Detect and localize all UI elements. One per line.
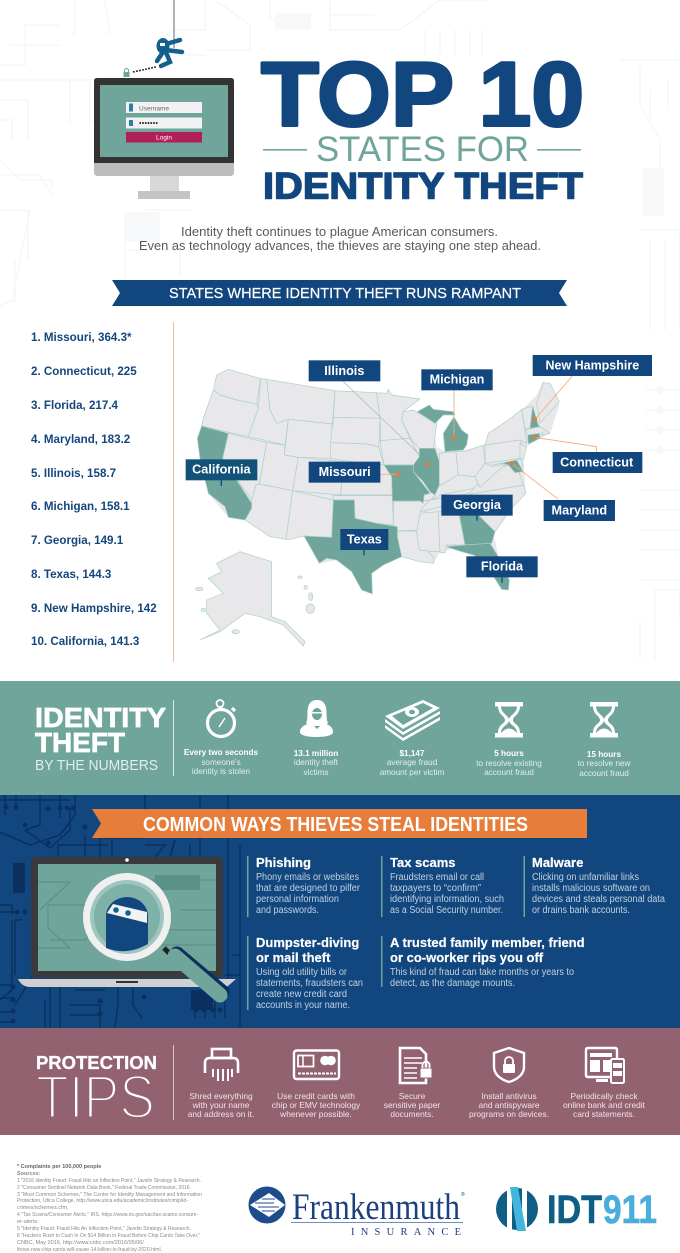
logo: Frankenmuth Insurance [248, 1186, 465, 1238]
map of United States: Maryland [552, 503, 607, 517]
ranked state list: 7. Georgia, 149.1 [31, 534, 124, 547]
text block: phishing: Phony emails or websites [256, 872, 359, 883]
map of United States: Connecticut [560, 455, 634, 469]
text block: trusted family member: This kind of fraud can take months or years to [390, 967, 575, 978]
text block: dumpster-diving: Using old utility bills or [256, 967, 348, 978]
tip: secure documents: Secure [399, 1091, 426, 1101]
tip: antivirus: programs on devices. [469, 1109, 549, 1119]
icon: stack of money [385, 700, 440, 741]
tip: antivirus: Install antivirus [481, 1091, 537, 1101]
tip: secure documents [384, 1091, 440, 1119]
heading: identity theft by the numbers: THEFT [35, 727, 125, 758]
stat: every two seconds: identity is stolen [192, 767, 251, 776]
tip: secure documents: sensitive paper [384, 1100, 440, 1110]
tip: credit cards: chip or EMV technology [272, 1100, 361, 1110]
ranked state list: 4. Maryland, 183.2 [31, 433, 130, 446]
footnotes and sources: 2 "Consumer Sentinel Network Data Book," Federal Trade Commission, 2016. [17, 1185, 191, 1191]
map of United States: Georgia [453, 498, 502, 512]
map of United States: Michigan [430, 373, 484, 387]
panel: protection tips [0, 1028, 680, 1135]
stat: 13.1 million: 13.1 million [294, 749, 338, 758]
icon: shield with padlock [494, 1048, 524, 1082]
stat: 5 hours: 5 hours [494, 749, 524, 758]
logo: IDT911: IDT [547, 1188, 602, 1232]
heading: identity theft by the numbers [35, 702, 166, 774]
text block: malware: Clicking on unfamiliar links [532, 872, 639, 883]
text block: dumpster-diving: Dumpster-diving [256, 935, 359, 950]
stat: every two seconds: Every two seconds [184, 748, 259, 757]
stat: $1,147 [380, 749, 444, 777]
map of United States: Florida [481, 560, 524, 574]
stat: 5 hours: account fraud [484, 768, 534, 777]
text block: malware: or drains bank accounts. [532, 905, 630, 916]
text block: phishing: that are designed to pilfer [256, 883, 361, 894]
intro text [139, 224, 541, 253]
ranked state list: 10. California, 141.3 [31, 635, 140, 648]
stat: 15 hours: to resolve new [578, 759, 630, 768]
stat: 15 hours [578, 750, 630, 778]
tip: antivirus: and antispyware [478, 1100, 540, 1110]
ranked state list: 8. Texas, 144.3 [31, 568, 112, 581]
title: IDENTITY THEFT [263, 166, 583, 206]
icon: desktop monitor with login form: ••••••• [139, 120, 159, 128]
tip: secure documents: documents. [390, 1109, 434, 1119]
text block: dumpster-diving: statements, fraudsters can [256, 978, 363, 989]
icon: desktop monitor with login form: Username [139, 106, 169, 112]
text block: dumpster-diving: create new credit card [256, 989, 347, 1000]
text block: tax scams: Fraudsters email or call [390, 872, 484, 883]
footnotes and sources: 4 "Tax Scams/Consumer Alerts," IRS, https://www.irs.gov/uac/tax-scams-consum- [17, 1212, 198, 1218]
tip: credit cards [272, 1091, 361, 1119]
ranked state list: 2. Connecticut, 225 [31, 365, 137, 378]
footnotes and sources: 1 "2016 Identity Fraud: Fraud Hits an Inflection Point," Javelin Strategy & Research. [17, 1178, 201, 1184]
footnotes and sources: Sources: [17, 1171, 41, 1177]
footnotes and sources: 6 "Hackers Rush to Cash In On $14 Billion in Fraud Before Chip Cards Take Over," [17, 1233, 200, 1239]
text block: malware [532, 855, 666, 916]
tip: shred: and address on it. [188, 1109, 254, 1119]
logo: Frankenmuth Insurance: ® [461, 1191, 465, 1198]
footnotes and sources [17, 1164, 202, 1253]
text block: tax scams: Tax scams [390, 855, 456, 870]
tip: shred [188, 1091, 254, 1119]
icon: padlock with password dots [124, 67, 156, 77]
icon: laptop with magnifier and thief [18, 857, 236, 995]
heading: identity theft by the numbers: IDENTITY [35, 702, 166, 733]
footnotes and sources: * Complaints per 100,000 people [17, 1164, 101, 1170]
tip: shred: with your name [192, 1100, 250, 1110]
text block: dumpster-diving: or mail theft [256, 950, 331, 965]
intro text: Identity theft continues to plague American consumers. [181, 224, 498, 239]
text block: phishing: personal information [256, 894, 339, 905]
tip: check statements: card statements. [573, 1109, 635, 1119]
text block: malware: Malware [532, 855, 583, 870]
icon: stopwatch [208, 700, 235, 736]
heading: protection tips: PROTECTION [36, 1053, 157, 1073]
icon: computer and phone [586, 1048, 624, 1083]
stat: every two seconds [184, 748, 259, 776]
map of United States: Missouri [319, 465, 371, 479]
map of United States: New Hampshire [545, 358, 639, 372]
ranked state list: 6. Michigan, 158.1 [31, 500, 130, 513]
stat: 13.1 million [294, 749, 339, 777]
text block: dumpster-diving [256, 935, 363, 1011]
tip: check statements [563, 1091, 646, 1119]
stat: $1,147: average fraud [387, 758, 438, 767]
ranked state list [31, 331, 157, 648]
stat: 15 hours: account fraud [579, 769, 629, 778]
text block: phishing [256, 855, 361, 916]
tip: shred: Shred everything [189, 1091, 253, 1101]
heading: protection tips: TIPS [36, 1063, 155, 1131]
stat: every two seconds: someone's [201, 758, 241, 767]
banner: states heading: STATES WHERE IDENTITY THEFT RUNS RAMPANT [169, 286, 521, 302]
panel: identity theft by the numbers [0, 681, 680, 795]
ranked state list: 9. New Hampshire, 142 [31, 602, 157, 615]
tip: credit cards: Use credit cards with [277, 1091, 355, 1101]
icon: thief on rope [156, 0, 182, 66]
text block: trusted family member: or co-worker rips you off [390, 950, 544, 965]
footnotes and sources: those-new-chip-cards-will-cause-14-billion-in-fraud-by-2020.html. [17, 1247, 162, 1253]
text block: tax scams [390, 855, 504, 916]
stat: 5 hours [476, 749, 542, 777]
map of United States [186, 355, 652, 646]
banner: common ways [92, 809, 587, 838]
tip: antivirus [469, 1091, 549, 1119]
footnotes and sources: CNBC, May 2016, http://www.cnbc.com/2016/05/06/ [17, 1240, 144, 1246]
text block: tax scams: as a Social Security number. [390, 905, 503, 916]
footnotes and sources: 3 "Most Common Schemes," The Center for Identity Management and Information [17, 1192, 202, 1198]
text block: trusted family member: detect, as the damage mounts. [390, 978, 515, 989]
footnotes and sources: 5 "Identity Fraud: Fraud Hits An Inflection Point," Javelin Strategy & Research. [17, 1226, 191, 1232]
title: TOP 10 [261, 44, 584, 146]
icon: shredder [205, 1049, 238, 1081]
logo: Frankenmuth Insurance: Frankenmuth [292, 1187, 460, 1228]
tip: credit cards: whenever possible. [279, 1109, 352, 1119]
text block: tax scams: taxpayers to “confirm” [390, 883, 481, 894]
logo: Frankenmuth Insurance: INSURANCE [351, 1227, 461, 1238]
logo: IDT911: 911 [603, 1188, 657, 1232]
intro text: Even as technology advances, the thieves are staying one step ahead. [139, 238, 541, 253]
icon: desktop monitor with login form [94, 78, 234, 199]
text block: phishing: Phishing [256, 855, 311, 870]
title: STATES FOR [316, 130, 529, 169]
ranked state list: 1. Missouri, 364.3* [31, 331, 132, 344]
text block: dumpster-diving: accounts in your name. [256, 1000, 350, 1011]
stat: 15 hours: 15 hours [587, 750, 622, 759]
footnotes and sources: er-alerts. [17, 1219, 39, 1225]
icon: hourglass, five hours [495, 702, 523, 738]
map of United States: California [192, 463, 251, 477]
heading: identity theft by the numbers: BY THE NUMBERS [35, 757, 158, 774]
map of United States: Texas [347, 532, 382, 546]
text block: trusted family member [390, 935, 585, 989]
panel: common ways thieves steal identities [0, 795, 680, 1029]
stat: 13.1 million: victims [303, 768, 329, 777]
stat: 13.1 million: identity theft [294, 758, 339, 767]
tip: check statements: Periodically check [570, 1091, 638, 1101]
footnotes and sources: crimes/schemes.cfm. [17, 1205, 69, 1211]
stat: $1,147: $1,147 [399, 749, 425, 758]
icon: credit card [294, 1050, 339, 1079]
banner: states heading [112, 280, 567, 306]
text block: trusted family member: A trusted family member, friend [390, 935, 585, 950]
stat: $1,147: amount per victim [380, 768, 444, 777]
tip: check statements: online bank and credit [563, 1100, 646, 1110]
footnotes and sources: Protection, Utica College, http://www.utica.edu/academic/institutes/cimip/id- [17, 1198, 188, 1204]
text block: phishing: and passwords. [256, 905, 319, 916]
logo: IDT911 [496, 1187, 657, 1232]
text block: malware: devices and steals personal data [532, 894, 666, 905]
map of United States: Illinois [324, 364, 364, 378]
icon: hourglass, fifteen hours [590, 702, 618, 738]
ranked state list: 5. Illinois, 158.7 [31, 467, 116, 480]
banner: common ways: COMMON WAYS THIEVES STEAL IDENTITIES [143, 814, 528, 836]
stat: 5 hours: to resolve existing [476, 759, 542, 768]
icon: desktop monitor with login form: Login [156, 134, 172, 142]
icon: document with lock [400, 1048, 432, 1083]
text block: tax scams: identifying information, such [390, 894, 504, 905]
ranked state list: 3. Florida, 217.4 [31, 399, 119, 412]
icon: person silhouette [300, 700, 333, 737]
title [261, 44, 584, 206]
text block: malware: installs malicious software on [532, 883, 650, 894]
